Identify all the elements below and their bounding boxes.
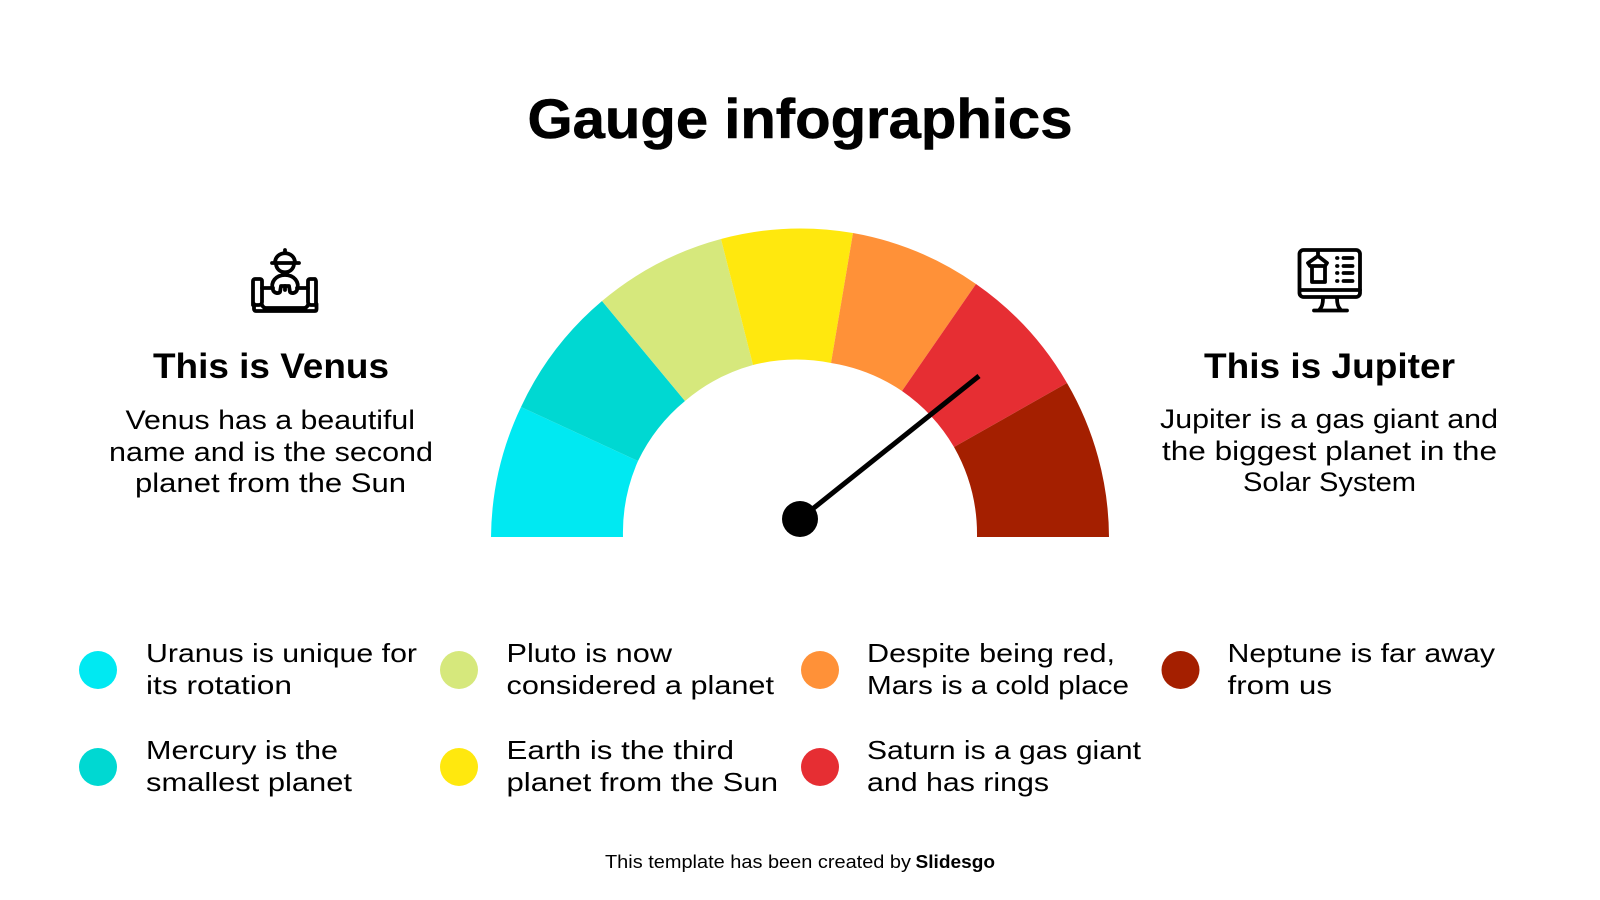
text: Jupiter description: the biggest planet in the	[1162, 436, 1497, 466]
chart: gauge	[491, 229, 1109, 537]
text: Venus description: planet from the Sun	[135, 468, 406, 498]
legend item: Earth: planet from the Sun	[506, 767, 778, 797]
legend item: Neptune: Neptune is far away	[1228, 638, 1495, 668]
legend item: Uranus	[79, 638, 417, 700]
segment: teal	[521, 301, 685, 461]
text: Venus description	[109, 405, 433, 498]
heading: This is Venus: This is Venus	[153, 347, 389, 386]
legend item: Saturn: Saturn is a gas giant	[867, 735, 1142, 765]
legend item: Mercury: Mercury is the	[146, 735, 338, 765]
legend item: Earth: Earth is the third	[506, 735, 734, 765]
needle	[782, 376, 979, 537]
legend item: Saturn: and has rings	[867, 767, 1049, 797]
legend item: Saturn	[801, 735, 1142, 797]
text: Venus description: name and is the second	[109, 437, 433, 467]
footer credit: This template has been created by	[605, 852, 911, 872]
legend item: Mars: Despite being red,	[867, 638, 1115, 668]
heading: This is Jupiter: This is Jupiter	[1204, 347, 1455, 386]
text: Venus description: Venus has a beautiful	[126, 405, 415, 435]
legend item: Uranus: Uranus is unique for	[146, 638, 417, 668]
legend item: Mercury: smallest planet	[146, 767, 353, 797]
segment: cyan	[491, 407, 638, 537]
segment: yellow	[721, 229, 853, 365]
legend item: Pluto: considered a planet	[506, 670, 775, 700]
segment: lime	[602, 239, 753, 401]
legend item: Uranus: its rotation	[146, 670, 292, 700]
legend item: Neptune	[1162, 638, 1495, 700]
segment: dark red	[954, 383, 1109, 537]
legend item: Pluto: Pluto is now	[506, 638, 672, 668]
legend item: Pluto	[440, 638, 775, 700]
segment: red	[902, 284, 1067, 447]
icon: monitor with house	[1300, 250, 1360, 310]
legend item: Neptune: from us	[1228, 670, 1332, 700]
legend item: Mercury	[79, 735, 353, 797]
panel: Venus	[109, 250, 433, 498]
footer credit: Slidesgo	[916, 852, 995, 872]
legend item: Mars: Mars is a cold place	[867, 670, 1129, 700]
legend item: Mars	[801, 638, 1129, 700]
text: Jupiter description: Solar System	[1243, 467, 1416, 497]
icon: worker with pipe	[253, 250, 316, 311]
title: Gauge infographics	[528, 87, 1072, 150]
text: Jupiter description	[1160, 404, 1498, 497]
text: Jupiter description: Jupiter is a gas giant and	[1160, 404, 1498, 434]
legend item: Earth	[440, 735, 778, 797]
panel: Jupiter	[1160, 250, 1498, 497]
segment: orange	[831, 233, 976, 391]
legend	[79, 638, 1495, 797]
